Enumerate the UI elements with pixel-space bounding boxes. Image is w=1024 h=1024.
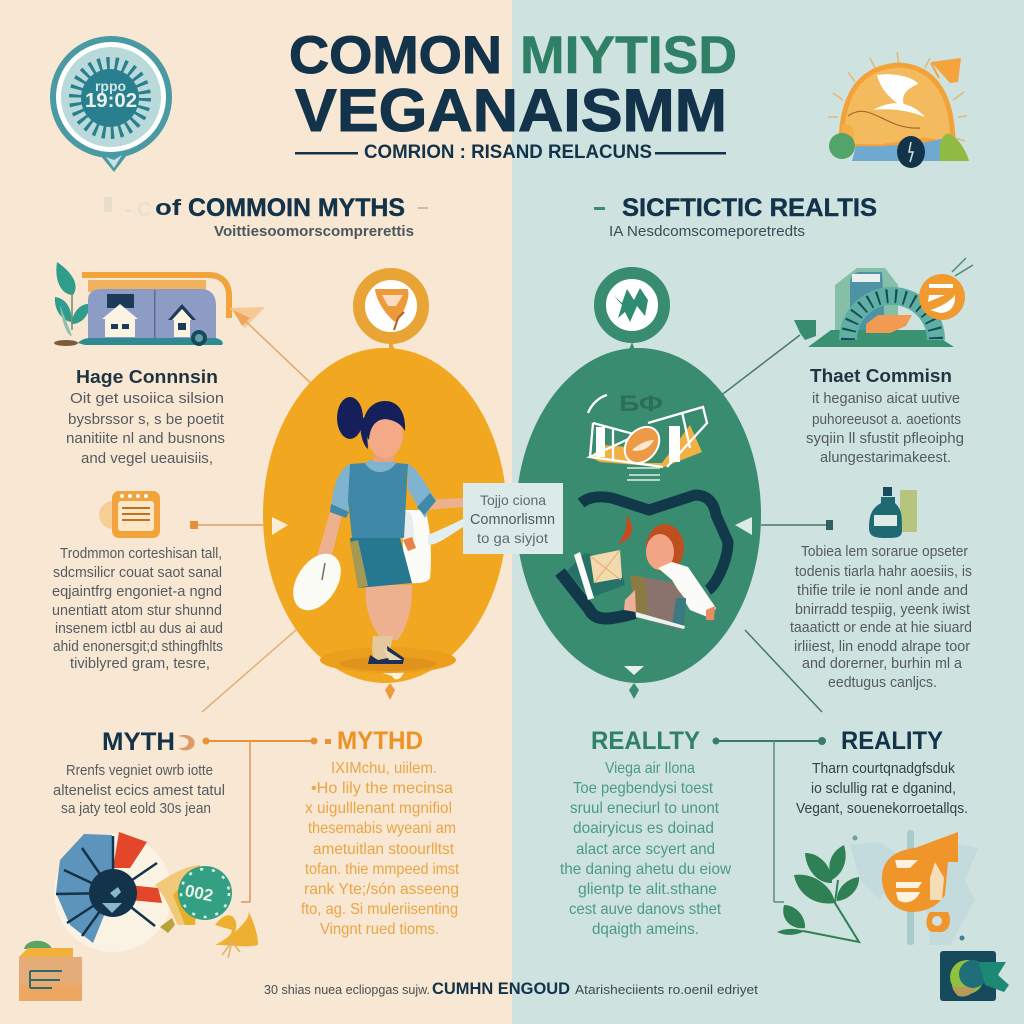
text block: left upper myth: bysbrssor s, s be poetit	[68, 412, 224, 428]
text block: green reality: cest auve danovs sthet	[569, 901, 722, 918]
text block: left upper myth	[66, 367, 225, 467]
text block: right lower reality: and dorerner, burhin ml a	[802, 656, 963, 672]
callout: center label: Comnorlismn	[470, 511, 555, 528]
bottom myth headings and connector: MYTHD	[337, 727, 423, 755]
text block: right upper reality: alungestarimakeest.	[820, 450, 951, 466]
text block: green reality: alact arce scyert and	[576, 841, 715, 858]
text block: orange myth: fto, ag. Si muleriisenting	[301, 901, 458, 918]
text block: left lower myth: Trodmmon corteshisan tall,	[60, 546, 222, 562]
text block: green reality: dqaigth ameins.	[592, 921, 699, 938]
text block: right lower reality: taaatictt or ende at hie siuard	[790, 620, 972, 636]
bottom myth headings and connector: MYTH	[102, 728, 175, 756]
text block: left upper myth: nanitiite nl and busnons	[66, 431, 225, 447]
text block: bottom left myth: Rrenfs vegniet owrb iotte	[66, 763, 213, 779]
text block: green reality: Toe pegbendysi toest	[573, 780, 714, 797]
connector: right middle	[761, 520, 833, 530]
heading: scientific realities: SICFTICTIC REALTIS	[622, 194, 877, 222]
text block: green reality: the daning ahetu du eiow	[560, 861, 731, 878]
title: MIYTISD	[520, 26, 737, 85]
text block: orange myth: Vingnt rued tioms.	[320, 921, 439, 938]
icon: green reality badge	[600, 273, 664, 358]
heading: common myths: of	[155, 195, 182, 220]
reality headings and connector	[591, 727, 943, 902]
dark frame band	[560, 495, 728, 619]
callout: center label: to ga siyjot	[477, 530, 548, 546]
icon: sun dome	[828, 52, 969, 168]
bottom myth headings and connector	[102, 727, 423, 902]
text block: right upper reality: it heganiso aicat uutive	[812, 391, 960, 407]
text block: green reality: doairyicus es doinad	[573, 820, 714, 837]
text block: right lower reality: todenis tiarla hahr aoesiis, is	[795, 564, 972, 580]
heading: common myths: Voittiesoomorscomprerettis	[214, 223, 414, 240]
arrow: left upper connector	[230, 307, 318, 390]
text block: right upper reality	[806, 366, 964, 466]
illustration: green building with food	[808, 258, 973, 347]
title: COMON	[289, 26, 502, 85]
icon: orange myth badge	[359, 274, 423, 358]
text block: bottom left myth: altenelist ecics amest tatul	[53, 783, 225, 799]
text block: green reality: glientp te alit.sthane	[578, 881, 717, 898]
heading: common myths: - C	[125, 199, 152, 221]
text block: dark reality: io sclullig rat e dganind,	[811, 780, 956, 797]
text block: right lower reality	[790, 544, 972, 691]
heading: common myths: COMMOIN MYTHS	[188, 194, 405, 222]
text block: left lower myth: sdcmsilicr couat saot sanal	[53, 565, 222, 581]
text block: right lower reality: thifie trile ie nonl ande and	[797, 583, 968, 599]
icon: clock badge	[53, 39, 169, 172]
panel: orange oval with woman	[263, 348, 507, 700]
text block: green reality	[560, 760, 731, 938]
footer text	[264, 979, 758, 998]
text block: bottom left myth: sa jaty teol eold 30s jean	[61, 801, 211, 817]
text block: orange myth	[301, 760, 459, 938]
icon: clock badge: rppo	[95, 78, 126, 94]
icon: clock badge: 19:02	[85, 90, 137, 112]
text block: left upper myth: and vegel ueauisiis,	[81, 451, 213, 467]
reality headings and connector: REALLTY	[591, 727, 700, 755]
text block: orange myth: ametuitlan stoourlltst	[313, 841, 455, 858]
text block: left lower myth: tiviblyred gram, tesre,	[70, 656, 210, 672]
text block: left lower myth: ahid enonersgit;d sthingfhlts	[53, 639, 223, 655]
text block: left lower myth: insenem ictbl au dus ai aud	[55, 621, 223, 637]
text block: left lower myth: unentiatt atom stur shunnd	[52, 603, 222, 619]
heading: scientific realities	[594, 194, 877, 240]
text block: left upper myth: Oit get usoiica silsion	[70, 391, 224, 407]
text block: dark reality	[796, 760, 968, 817]
text block: orange myth: thesemabis wyeani am	[308, 820, 456, 837]
text block: orange myth: tofan. thie mmpeed imst	[305, 861, 459, 878]
text block: dark reality: Vegant, souenekorroetallqs.	[796, 800, 968, 817]
text block: green reality: sruul eneciurl to unont	[570, 800, 720, 817]
person with book	[567, 515, 716, 630]
icon: recipe card	[99, 491, 160, 538]
text block: left lower myth	[52, 546, 223, 672]
panel: green oval with shop and person	[516, 348, 761, 699]
text block: dark reality: Tharn courtqnadgfsduk	[812, 760, 955, 777]
footer text: Atarisheciients ro.oenil edriyet	[575, 982, 758, 997]
text block: bottom left myth	[53, 763, 225, 817]
text block: left lower myth: eqjaintfrg engoniet-a ngnd	[52, 584, 222, 600]
illustration: leaves and orange gear	[777, 830, 978, 945]
text block: left upper myth: Hage Connnsin	[76, 367, 218, 387]
shop cart icon: БФ	[619, 391, 663, 416]
connector: lower diagonals	[202, 630, 822, 712]
arrow: right upper connector	[715, 320, 816, 400]
text block: right lower reality: bnirradd tespiig, yeenk iwist	[795, 602, 970, 618]
illustration: plant and buildings	[54, 262, 229, 346]
shop cart icon	[588, 391, 707, 480]
footer text: 30 shias nuea ecliopgas sujw.	[264, 982, 430, 997]
title	[289, 26, 737, 144]
callout: center label: Tojjo ciona	[480, 492, 546, 508]
illustration: fan wheel and green disc: 002	[183, 881, 215, 906]
title: VEGANAISMM	[295, 77, 727, 144]
text block: right lower reality: eedtugus canljcs.	[828, 675, 937, 691]
reality headings and connector: REALITY	[841, 727, 943, 755]
callout: center label	[463, 483, 563, 554]
footer text: CUMHN ENGOUD	[432, 979, 570, 998]
text block: orange myth: IXIMchu, uiilem.	[331, 760, 437, 777]
illustration: fan wheel and green disc	[54, 832, 258, 958]
text block: green reality: Viega air Ilona	[605, 760, 695, 777]
woman figure	[283, 397, 463, 664]
text block: orange myth: rank Yte;/són asseeng	[304, 881, 459, 898]
text block: right upper reality: puhoreeusot a. aoetionts	[812, 412, 961, 428]
icon: box folder	[19, 941, 82, 1001]
connector: left middle	[190, 521, 263, 529]
heading: common myths	[104, 194, 428, 240]
text block: right lower reality: irliiest, lin enodd alrape toor	[794, 639, 970, 655]
text block: orange myth: •Ho lily the mecinsa	[311, 780, 453, 797]
subtitle: COMRION : RISAND RELACUNS	[364, 142, 652, 163]
icon: bottle	[869, 487, 917, 538]
text block: right lower reality: Tobiea lem sorarue opseter	[801, 544, 968, 560]
text block: right upper reality: syqiin ll sfustit pfleoiphg	[806, 431, 964, 447]
icon: dark logo square	[940, 951, 1009, 1001]
heading: scientific realities: IA Nesdcomscomeporetredts	[609, 223, 805, 240]
text block: right upper reality: Thaet Commisn	[810, 366, 952, 386]
text block: orange myth: x uigulllenant mgnifiol	[305, 800, 452, 817]
